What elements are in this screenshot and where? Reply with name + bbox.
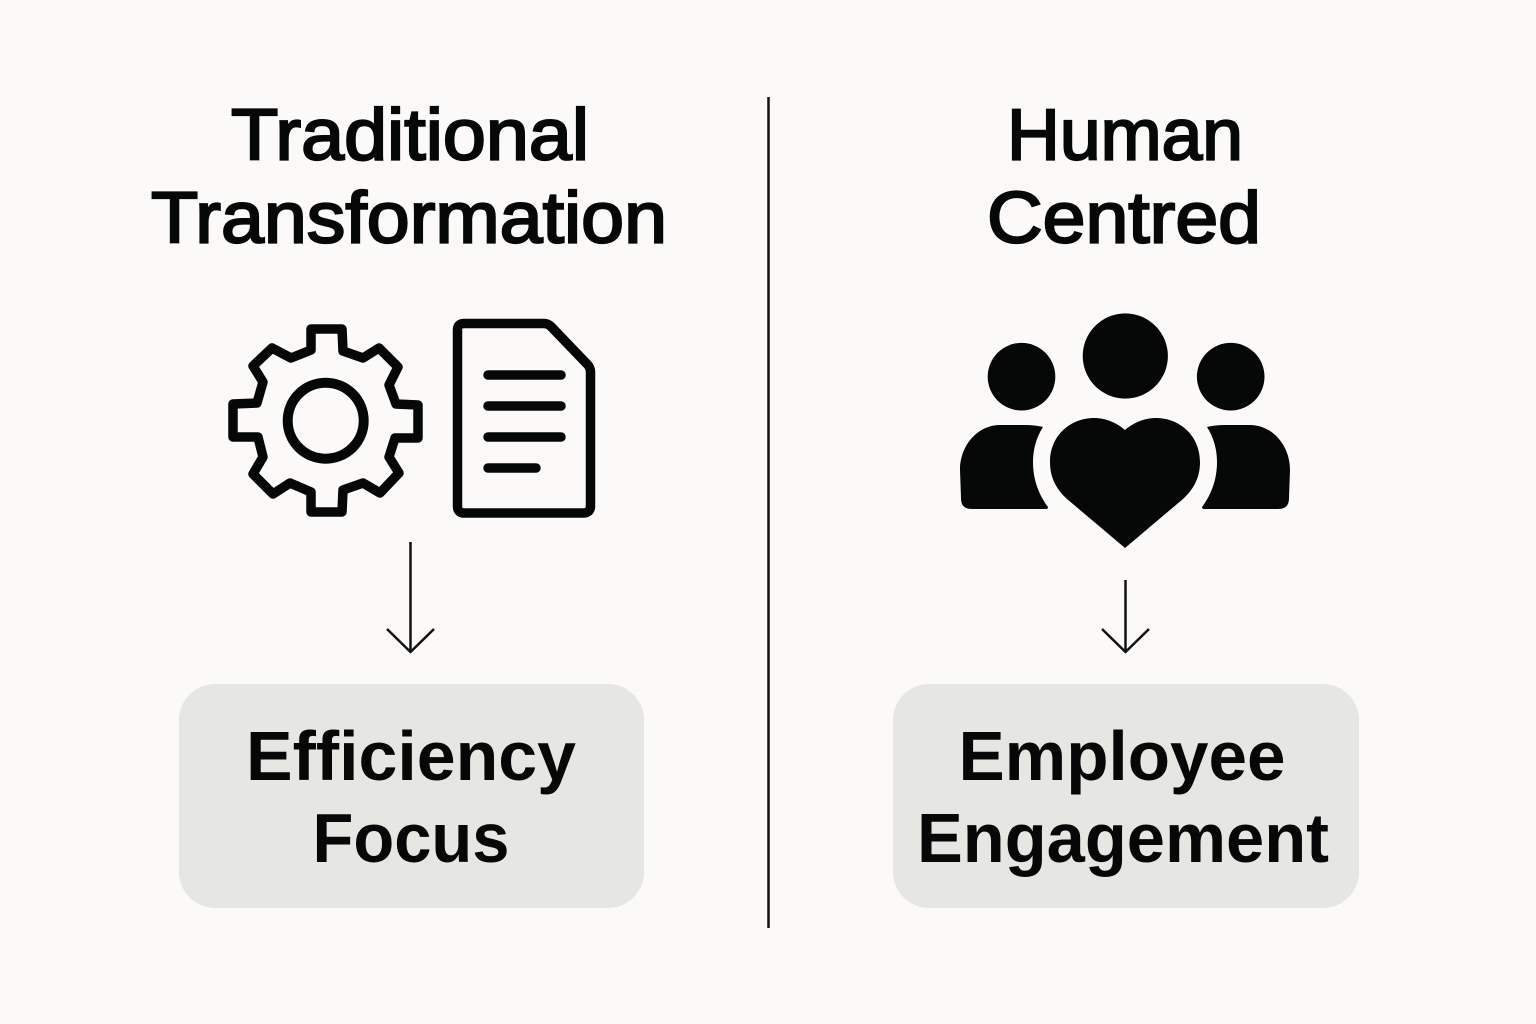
arrow: right — [1102, 580, 1149, 652]
panel: Employee Engagement: Employee — [958, 717, 1286, 795]
heading: Traditional Transformation — [151, 96, 667, 258]
panel: Efficiency Focus: Efficiency — [246, 717, 576, 795]
heading: Human Centred: Human — [1007, 96, 1243, 176]
panel: Employee Engagement: Engagement — [917, 799, 1329, 877]
heading: Human Centred: Centred — [987, 178, 1261, 258]
arrow: left — [387, 542, 434, 652]
heading: Traditional Transformation: Transformation — [151, 178, 667, 258]
heading: Traditional Transformation: Traditional — [231, 96, 589, 176]
icon: people with heart — [960, 313, 1290, 548]
icon: document — [458, 324, 590, 513]
panel: Efficiency Focus: Focus — [312, 799, 510, 877]
heading: Human Centred — [987, 96, 1261, 258]
icon: gear — [233, 329, 418, 512]
panel: Employee Engagement — [893, 684, 1359, 908]
panel: Efficiency Focus — [179, 684, 644, 908]
